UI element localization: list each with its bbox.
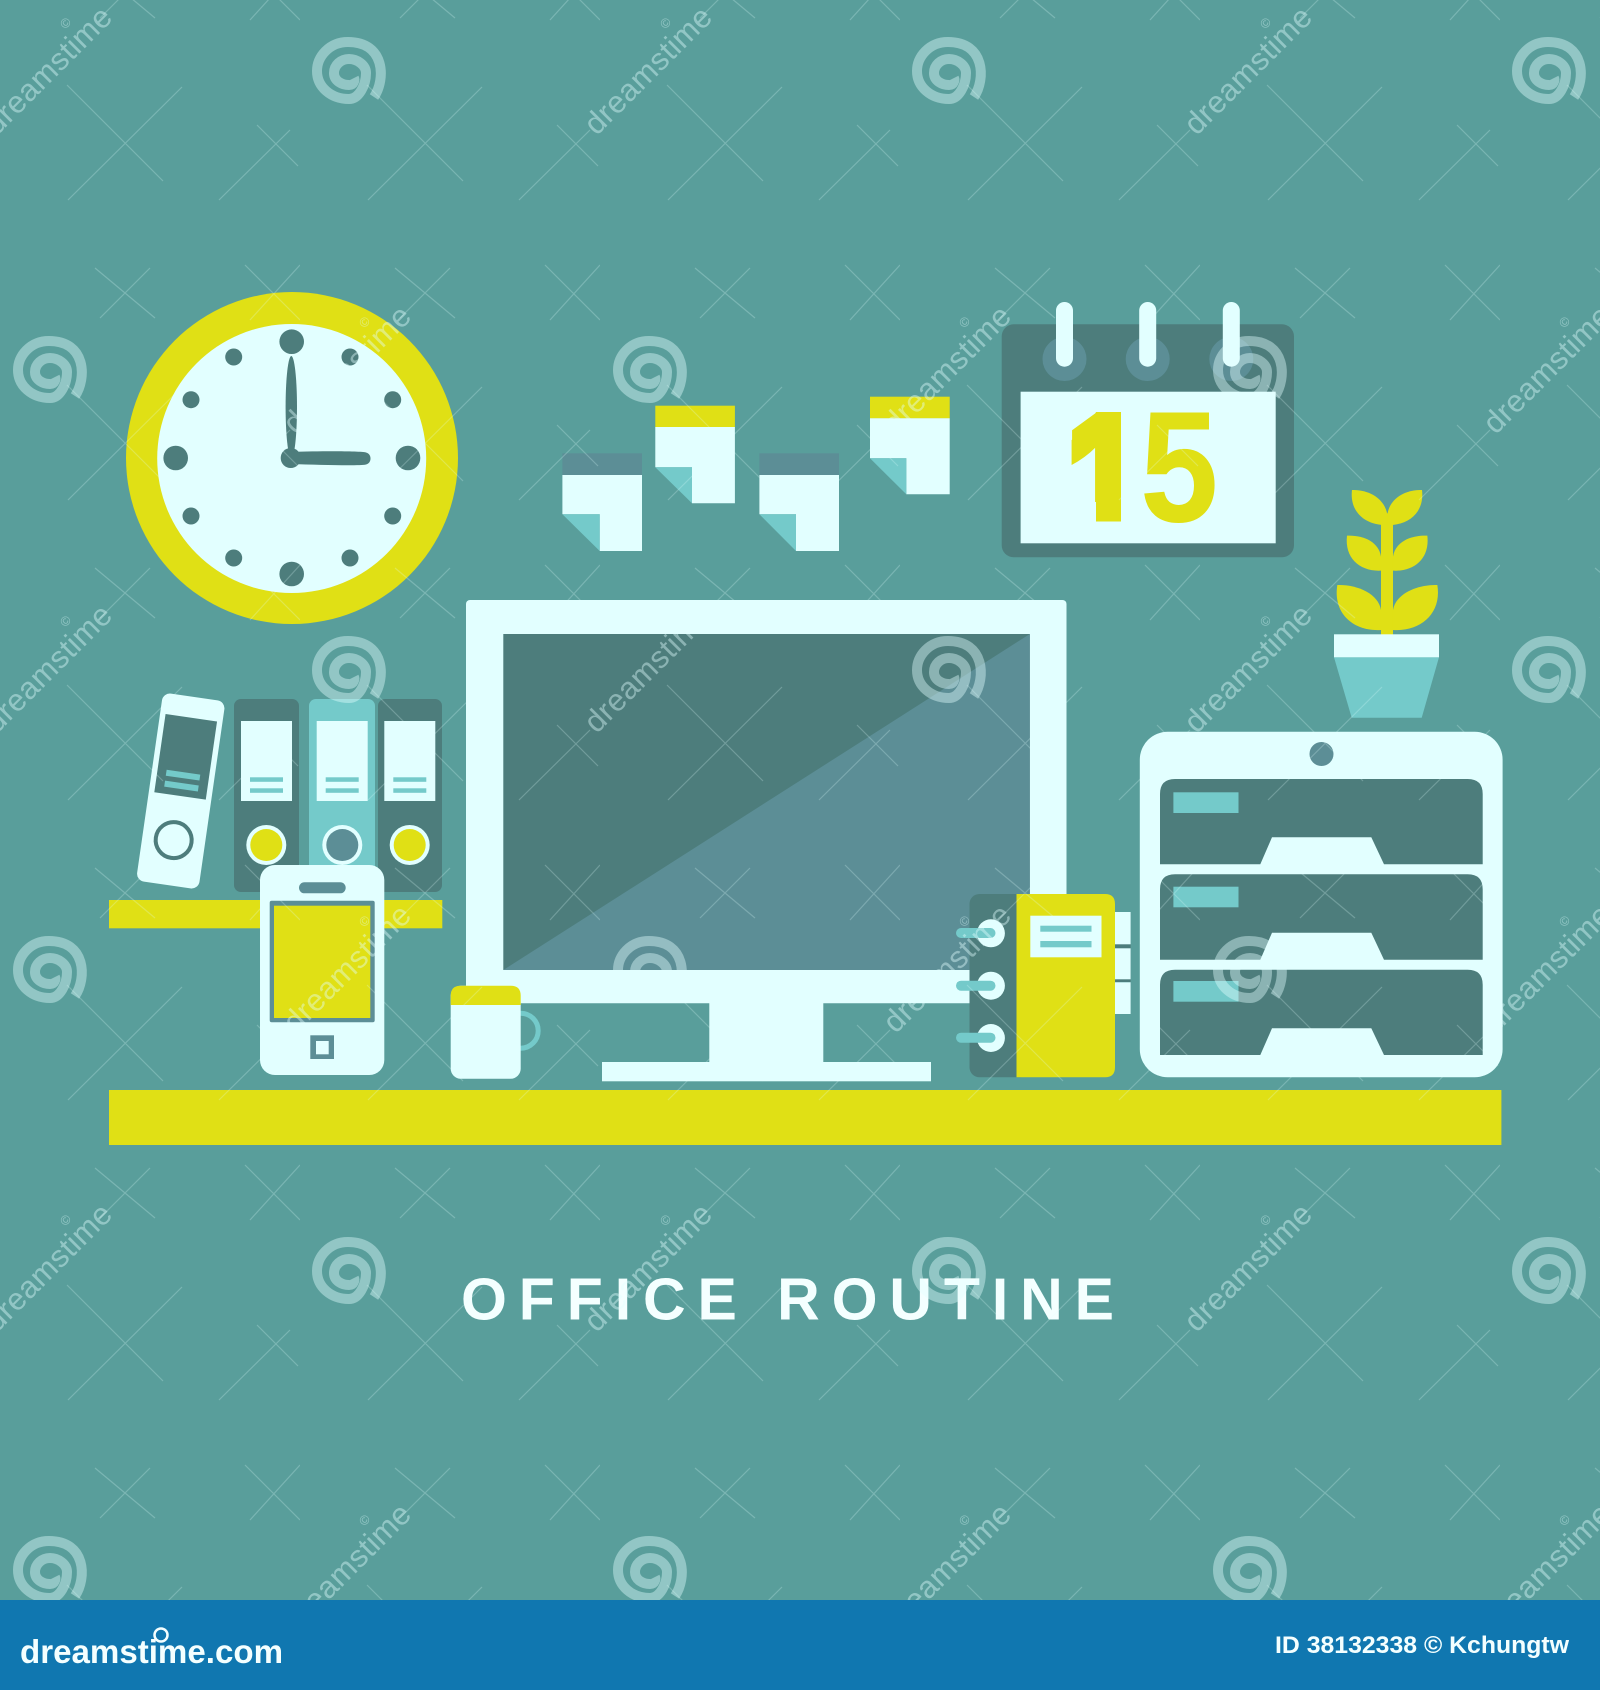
watermark overlay: ©: [57, 14, 74, 32]
watermark overlay: ©: [1257, 14, 1274, 32]
watermark overlay: dreamstime: [876, 1496, 1018, 1638]
watermark overlay: dreamstime: [276, 897, 418, 1039]
binder 3: [378, 699, 442, 892]
watermark overlay: dreamstime: [876, 897, 1018, 1039]
watermark overlay: dreamstime: [577, 597, 719, 739]
drawer 3: [1160, 970, 1483, 1055]
desk: [109, 1090, 1501, 1145]
footer logo text: dreamstime.com: [20, 1633, 283, 1670]
watermark overlay: dreamstime: [276, 1496, 418, 1638]
computer monitor: [466, 600, 1066, 1081]
watermark overlay: ©: [956, 912, 973, 930]
drawer 2: [1160, 874, 1483, 960]
binder 2: [309, 699, 375, 892]
wall calendar: [1002, 302, 1294, 557]
sticky notes: [562, 397, 950, 551]
calendar binding rings: [1042, 302, 1253, 381]
spiral notebook: [956, 894, 1131, 1077]
clock hour markers: [163, 329, 420, 586]
note 3: [759, 453, 839, 551]
filing cabinet: [1140, 732, 1503, 1077]
footer image id: ID 38132338 © Kchungtw: [1275, 1632, 1570, 1659]
watermark overlay: ©: [657, 612, 674, 630]
calendar date: 15: [1063, 380, 1218, 555]
wall clock: [126, 292, 458, 624]
note 4: [870, 397, 950, 494]
watermark overlay: ©: [956, 313, 973, 331]
footer bar: [0, 1600, 1600, 1690]
watermark overlay: dreamstime: [1177, 0, 1319, 141]
note 1: [562, 453, 642, 551]
note 2: [655, 406, 735, 503]
watermark overlay: ©: [356, 1511, 373, 1529]
watermark overlay: ©: [657, 1211, 674, 1229]
watermark overlay: dreamstime: [1177, 1196, 1319, 1338]
watermark overlay: ©: [57, 1211, 74, 1229]
drawer 1: [1160, 779, 1483, 864]
watermark overlay: ©: [1556, 313, 1573, 331]
watermark overlay: ©: [956, 1511, 973, 1529]
shelf: [109, 900, 442, 928]
clock hands: [281, 356, 370, 468]
watermark overlay: ©: [1556, 1511, 1573, 1529]
watermark overlay: dreamstime: [577, 1196, 719, 1338]
watermark overlay: ©: [1556, 912, 1573, 930]
watermark overlay: ©: [657, 14, 674, 32]
watermark overlay: dreamstime: [1177, 597, 1319, 739]
binder 1: [234, 699, 299, 892]
footer logo spiral: [154, 1628, 168, 1642]
watermark overlay: dreamstime: [876, 298, 1018, 440]
watermark overlay: ©: [1257, 612, 1274, 630]
smartphone: [260, 865, 384, 1075]
cordless phone: [136, 692, 225, 890]
watermark overlay: dreamstime: [577, 0, 719, 141]
coffee mug: [451, 986, 538, 1079]
plant in pot: [1334, 490, 1439, 718]
watermark overlay: ©: [356, 313, 373, 331]
watermark overlay: dreamstime: [276, 298, 418, 440]
watermark overlay: ©: [356, 912, 373, 930]
watermark overlay: ©: [1257, 1211, 1274, 1229]
notebook rings: [956, 919, 1005, 1052]
title: OFFICE ROUTINE: [461, 1266, 1114, 1332]
watermark overlay: ©: [57, 612, 74, 630]
